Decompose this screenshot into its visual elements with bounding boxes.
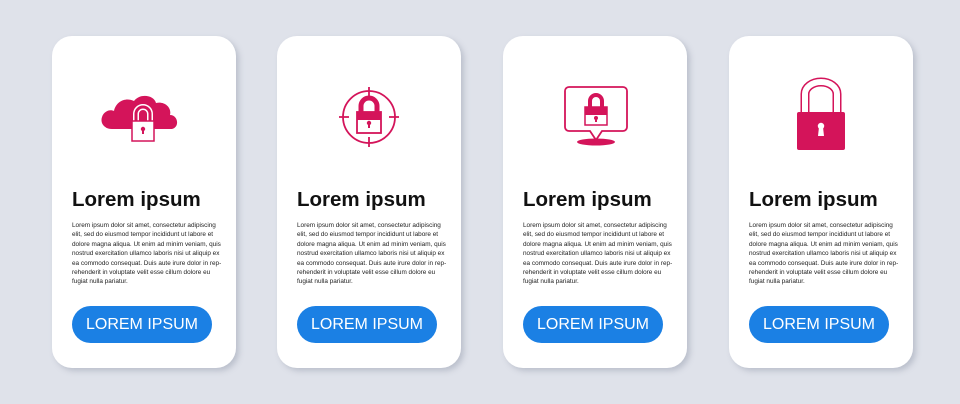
body text: Lorem ipsum dolor sit amet, consectetur adipiscing <box>297 222 441 229</box>
body text: ea commodo consequat. Duis aute irure dolor in rep- <box>523 260 672 267</box>
heading: Lorem ipsum <box>749 188 878 211</box>
body text: rehenderit in voluptate velit esse cillum dolore eu <box>72 269 210 276</box>
icon: padlock <box>797 78 845 150</box>
body text: elit, sed do eiusmod tempor incididunt ut labore et <box>72 231 213 238</box>
body text: nostrud exercitation ullamco laboris nisi ut aliquip ex <box>72 250 219 257</box>
body text <box>297 222 446 285</box>
body text: nostrud exercitation ullamco laboris nisi ut aliquip ex <box>749 250 896 257</box>
body text: fugiat nulla pariatur. <box>297 278 353 285</box>
body text: rehenderit in voluptate velit esse cillum dolore eu <box>749 269 887 276</box>
button: LOREM IPSUM <box>763 316 875 333</box>
body text: Lorem ipsum dolor sit amet, consectetur adipiscing <box>523 222 667 229</box>
body text: elit, sed do eiusmod tempor incididunt ut labore et <box>297 231 438 238</box>
button <box>523 306 663 343</box>
body text: rehenderit in voluptate velit esse cillum dolore eu <box>523 269 661 276</box>
body text: ea commodo consequat. Duis aute irure dolor in rep- <box>297 260 446 267</box>
body text: fugiat nulla pariatur. <box>72 278 128 285</box>
button <box>297 306 437 343</box>
body text: nostrud exercitation ullamco laboris nisi ut aliquip ex <box>523 250 670 257</box>
body text: elit, sed do eiusmod tempor incididunt ut labore et <box>523 231 664 238</box>
card 2 <box>277 36 461 368</box>
heading: Lorem ipsum <box>523 188 652 211</box>
body text: dolore magna aliqua. Ut enim ad minim veniam, quis <box>297 241 446 248</box>
icon: target lock <box>339 87 399 147</box>
body text: fugiat nulla pariatur. <box>749 278 805 285</box>
body text: rehenderit in voluptate velit esse cillum dolore eu <box>297 269 435 276</box>
button <box>72 306 212 343</box>
icon: cloud lock <box>102 96 178 142</box>
body text: dolore magna aliqua. Ut enim ad minim veniam, quis <box>72 241 221 248</box>
body text: ea commodo consequat. Duis aute irure dolor in rep- <box>749 260 898 267</box>
icon: speech bubble lock <box>564 86 628 146</box>
card 1 <box>52 36 236 368</box>
body text: dolore magna aliqua. Ut enim ad minim veniam, quis <box>749 241 898 248</box>
card 4 <box>729 36 913 368</box>
heading: Lorem ipsum <box>72 188 201 211</box>
body text <box>72 222 221 285</box>
button: LOREM IPSUM <box>86 316 198 333</box>
body text: fugiat nulla pariatur. <box>523 278 579 285</box>
body text: nostrud exercitation ullamco laboris nisi ut aliquip ex <box>297 250 444 257</box>
body text: elit, sed do eiusmod tempor incididunt ut labore et <box>749 231 890 238</box>
button <box>749 306 889 343</box>
button: LOREM IPSUM <box>311 316 423 333</box>
body text: dolore magna aliqua. Ut enim ad minim veniam, quis <box>523 241 672 248</box>
body text <box>523 222 672 285</box>
heading: Lorem ipsum <box>297 188 426 211</box>
body text: Lorem ipsum dolor sit amet, consectetur adipiscing <box>72 222 216 229</box>
body text: Lorem ipsum dolor sit amet, consectetur adipiscing <box>749 222 893 229</box>
card 3 <box>503 36 687 368</box>
button: LOREM IPSUM <box>537 316 649 333</box>
body text <box>749 222 898 285</box>
body text: ea commodo consequat. Duis aute irure dolor in rep- <box>72 260 221 267</box>
